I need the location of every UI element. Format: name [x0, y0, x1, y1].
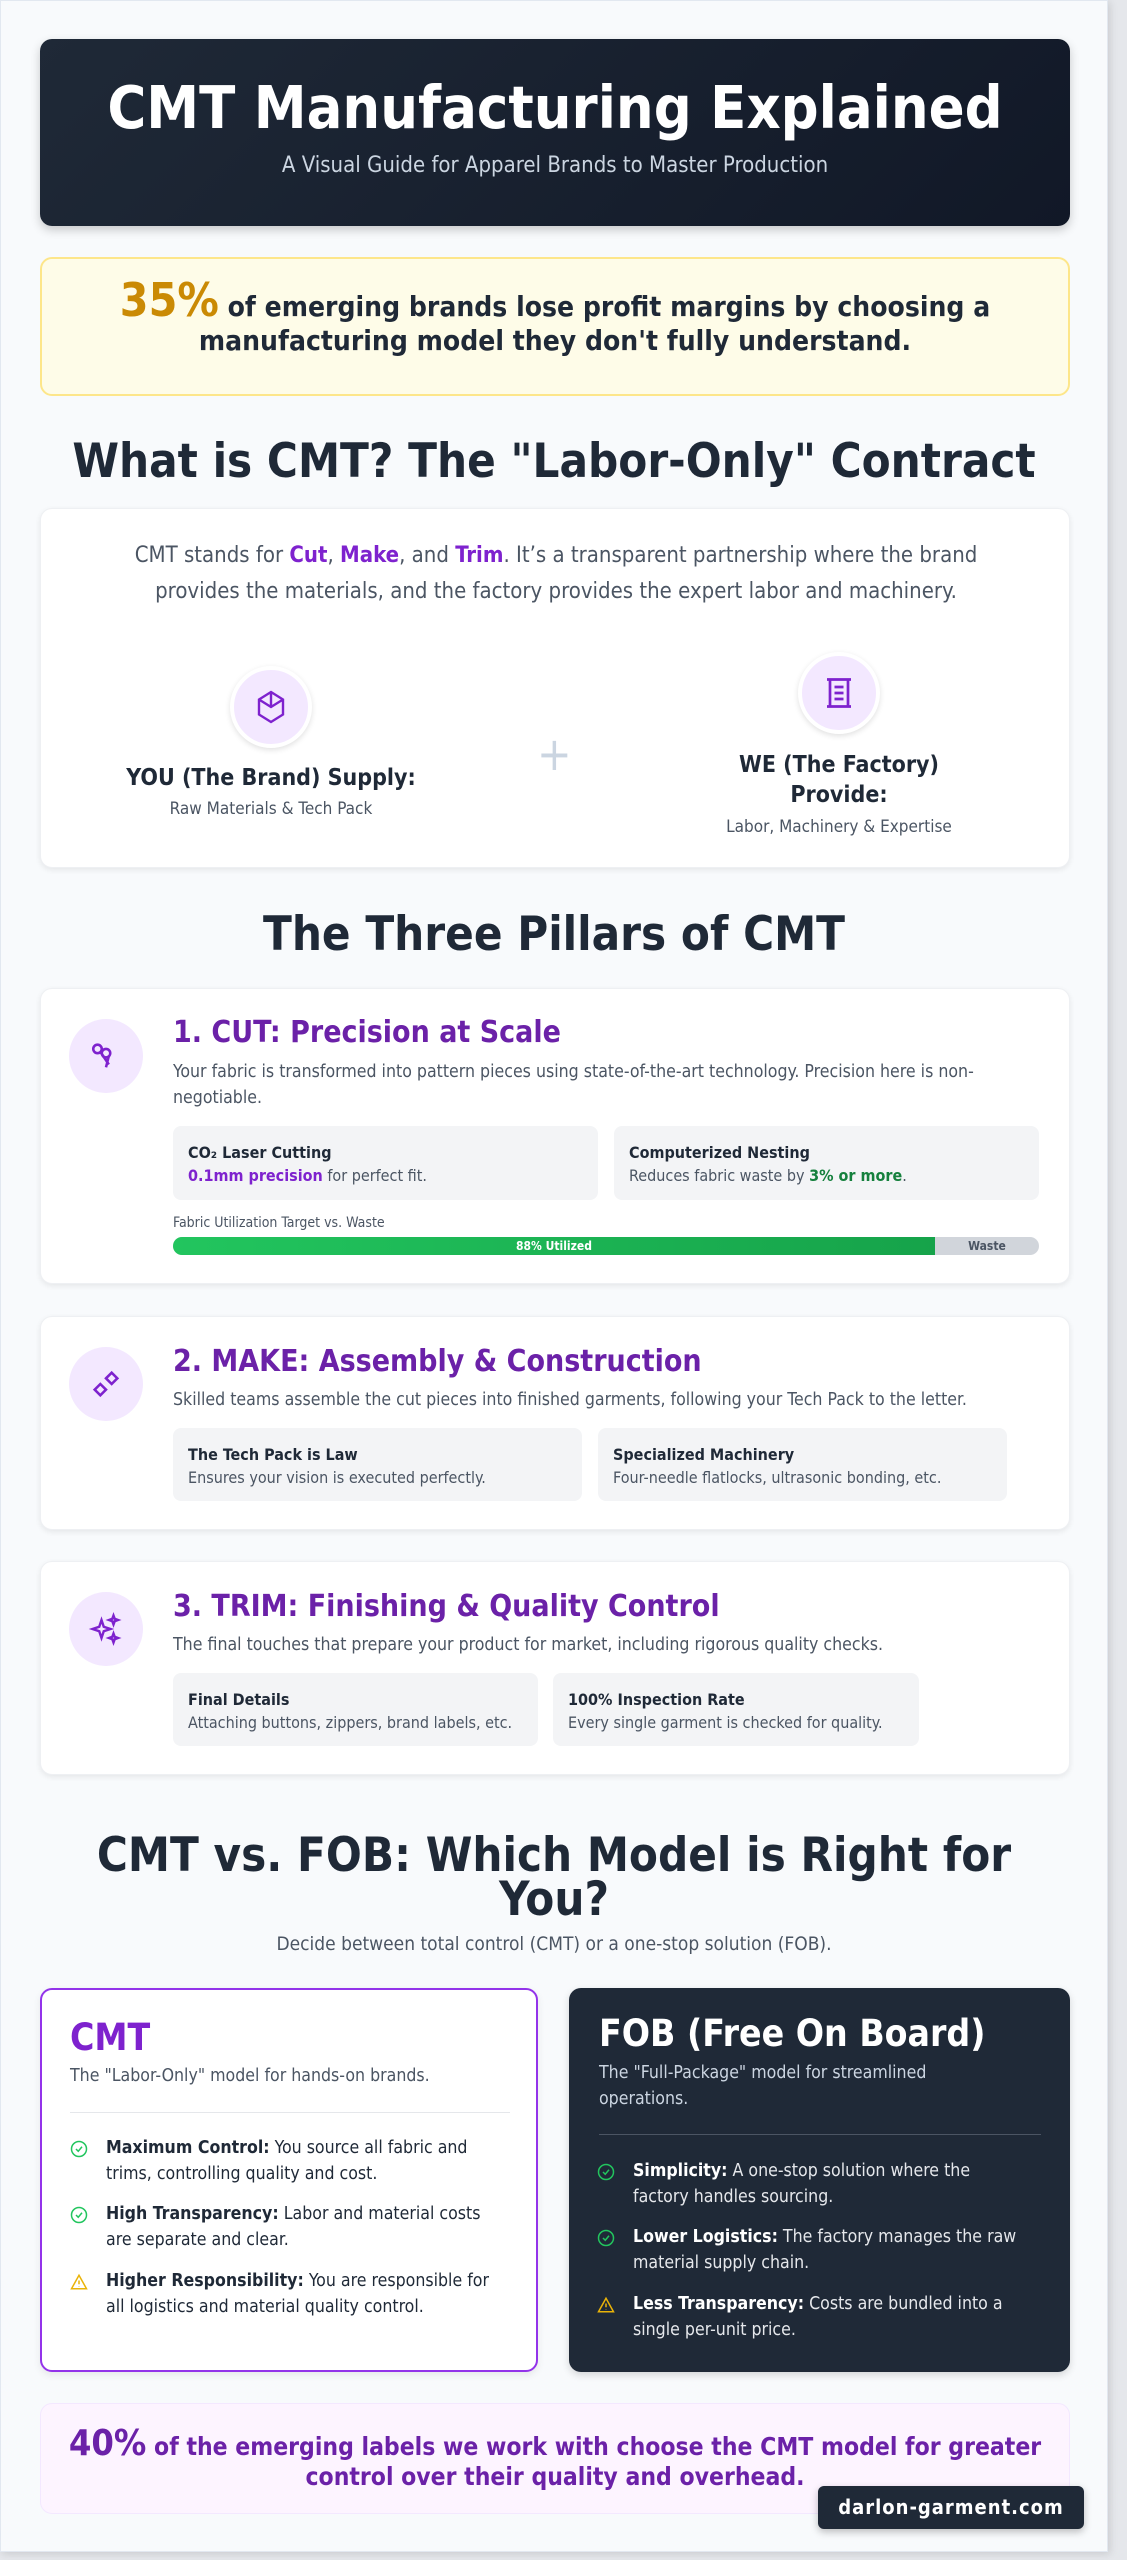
box: tech pack — [173, 1428, 582, 1501]
bar chart: utilization: 88% Utilized — [516, 1239, 592, 1253]
FOB title: FOB (Free On Board) — [599, 2012, 985, 2055]
heading: what is CMT: What is CMT? The "Labor-Only" Contract — [72, 434, 1036, 489]
box: machinery: Specialized Machinery — [613, 1445, 794, 1464]
box: inspection — [553, 1673, 919, 1746]
bar chart: utilization — [173, 1215, 1039, 1255]
list item: transparency — [70, 2204, 480, 2250]
list item: transparency: are separate and clear. — [106, 2230, 289, 2250]
stat callout: 40%: 40% of the emerging labels we work with choose the CMT model for greater — [69, 2423, 1041, 2464]
panel: make — [40, 1316, 1070, 1530]
panel: CMT option: The "Labor-Only" model for hands-on brands. — [70, 2066, 430, 2086]
bar chart: utilization: Waste — [968, 1239, 1006, 1253]
box: details: Final Details — [188, 1690, 289, 1709]
panel: cut — [40, 988, 1070, 1284]
subtitle: A Visual Guide for Apparel Brands to Master Production — [282, 153, 828, 178]
heading: CMT vs FOB: CMT vs. FOB: Which Model is Right for You? — [97, 1828, 1011, 1927]
description: Your fabric is transformed into pattern pieces using state-of-the-art technology. Precision here is non-negotiable. — [173, 1062, 974, 1108]
intro text — [135, 543, 977, 604]
description: The final touches that prepare your product for market, including rigorous quality checks. — [173, 1635, 883, 1655]
box: laser: 0.1mm precision for perfect fit. — [188, 1166, 427, 1185]
bar chart: utilization: Fabric Utilization Target vs. Waste — [173, 1215, 385, 1231]
we provide — [726, 752, 952, 837]
icon: scissors — [69, 1019, 143, 1093]
box: nesting — [614, 1126, 1039, 1200]
intro text: CMT stands for Cut, Make, and Trim. It’s a transparent partnership where the brand — [135, 543, 977, 568]
intro text: provides the materials, and the factory provides the expert labor and machinery. — [155, 579, 957, 604]
badge: website: darlon-garment.com — [838, 2495, 1064, 2519]
stat callout: 40% — [40, 2403, 1070, 2514]
list item: responsibility — [70, 2271, 489, 2317]
list item: control: Maximum Control: You source all fabric and trims, controlling quality and cost. — [106, 2138, 468, 2184]
panel: what is CMT — [40, 508, 1070, 868]
list item: logistics: Lower Logistics: The factory manages the raw material supply chain. — [633, 2227, 1016, 2273]
box: inspection: Every single garment is checked for quality. — [568, 1713, 883, 1732]
icon: factory doc — [798, 652, 880, 734]
icon: box — [230, 666, 312, 748]
stat callout: 35%: manufacturing model they don't fully understand. — [199, 324, 911, 357]
box: laser — [173, 1126, 598, 1200]
badge: website — [818, 2486, 1084, 2529]
list item: responsibility: all logistics and material quality control. — [106, 2297, 424, 2317]
stat callout: 35% — [40, 257, 1070, 396]
title: cut: 1. CUT: Precision at Scale — [173, 1015, 561, 1050]
box: machinery — [598, 1428, 1007, 1501]
panel: CMT option — [40, 1988, 538, 2372]
panel: FOB option — [569, 1988, 1070, 2372]
box: details — [173, 1673, 538, 1746]
box: machinery: Four-needle flatlocks, ultrasonic bonding, etc. — [613, 1468, 941, 1487]
you supply: YOU (The Brand) Supply: — [126, 765, 416, 791]
box: laser: CO₂ Laser Cutting — [188, 1143, 332, 1162]
you supply — [126, 765, 416, 819]
subheading: Decide between total control (CMT) or a one-stop solution (FOB). — [276, 1933, 832, 1955]
list item: less transparency: Less Transparency: Costs are bundled into a single per-unit price. — [633, 2294, 1003, 2340]
icon: sparkles — [69, 1592, 143, 1666]
title: CMT Manufacturing Explained — [107, 73, 1003, 142]
list item: transparency: High Transparency: Labor and material costs — [106, 2204, 480, 2224]
stat callout: 40%: control over their quality and overhead. — [305, 2462, 804, 2491]
you supply: Raw Materials & Tech Pack — [170, 799, 372, 819]
icon: needle — [69, 1347, 143, 1421]
heading: three pillars: The Three Pillars of CMT — [263, 907, 845, 962]
CMT title: CMT — [70, 2016, 150, 2059]
we provide: Labor, Machinery & Expertise — [726, 817, 952, 837]
we provide: Provide: — [790, 782, 888, 808]
box: nesting: Computerized Nesting — [629, 1143, 810, 1162]
we provide: WE (The Factory) — [739, 752, 939, 778]
stat callout: 35%: 35% of emerging brands lose profit margins by choosing a — [120, 273, 990, 327]
list item: simplicity: Simplicity: A one-stop solution where the factory handles sourcing. — [633, 2161, 970, 2207]
title: make: 2. MAKE: Assembly & Construction — [173, 1344, 702, 1379]
title: trim: 3. TRIM: Finishing & Quality Control — [173, 1589, 720, 1624]
description: Skilled teams assemble the cut pieces into finished garments, following your Tech Pack to the letter. — [173, 1390, 967, 1410]
panel: FOB option: The "Full-Package" model for streamlined operations. — [599, 2063, 926, 2109]
box: tech pack: Ensures your vision is executed perfectly. — [188, 1468, 486, 1487]
box: inspection: 100% Inspection Rate — [568, 1690, 745, 1709]
header banner — [40, 39, 1070, 226]
box: nesting: Reduces fabric waste by 3% or more. — [629, 1166, 907, 1185]
box: details: Attaching buttons, zippers, brand labels, etc. — [188, 1713, 512, 1732]
list item: responsibility: Higher Responsibility: You are responsible for — [106, 2271, 489, 2291]
panel: trim — [40, 1561, 1070, 1775]
box: tech pack: The Tech Pack is Law — [188, 1445, 358, 1464]
plus sign: + — [537, 727, 572, 781]
